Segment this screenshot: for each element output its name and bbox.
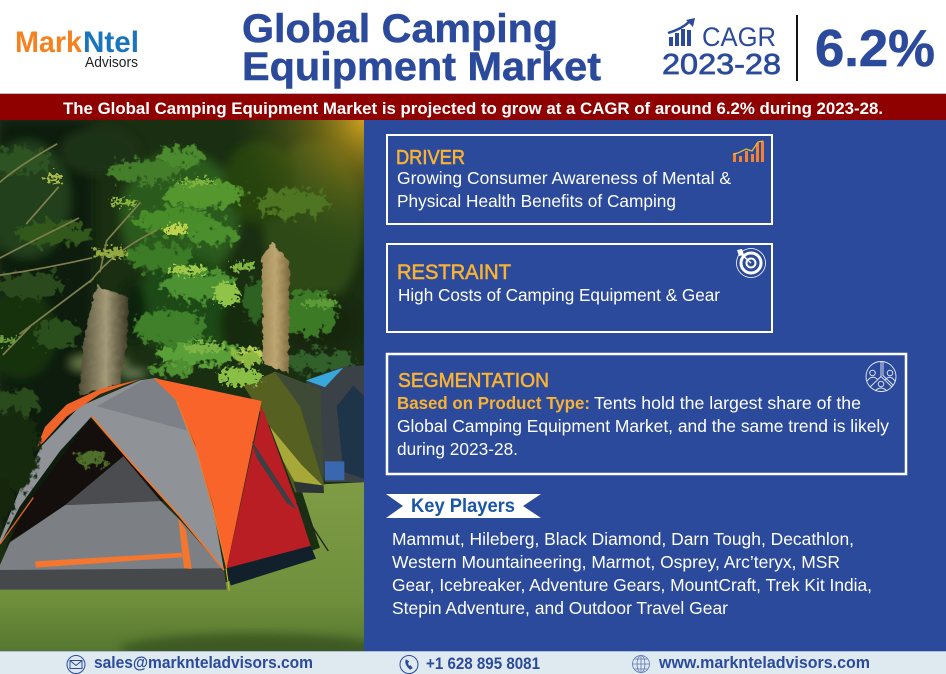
key players ribbon — [386, 494, 541, 518]
bright leaves — [0, 176, 337, 362]
tent: door opening — [2, 418, 163, 554]
driver text: Growing Consumer Awareness of Mental & — [397, 168, 731, 188]
red summary banner: The Global Camping Equipment Market is projected to grow at a CAGR of around 6.2% during 2023-28. — [63, 100, 883, 118]
dark foreground foliage over tent — [0, 410, 108, 520]
icon: segmented people circle — [866, 362, 896, 392]
foliage beside trunk — [150, 350, 260, 376]
logo: MarkNtel Advisors: Ntel — [83, 26, 139, 59]
logo: MarkNtel Advisors: Mark — [15, 26, 82, 59]
tent: navy hem — [227, 546, 316, 586]
tent: lower grey wall — [0, 501, 222, 570]
foreground fern — [218, 368, 262, 386]
website: www.marknteladvisors.com — [658, 653, 870, 672]
icon: globe — [632, 656, 650, 672]
key players list: Stepin Adventure, and Outdoor Travel Gear — [392, 598, 728, 618]
icon: CAGR growth chart — [668, 18, 695, 46]
background tent: blue — [306, 366, 364, 482]
key players ribbon: Key Players — [411, 496, 515, 517]
segmentation text: Based on Product Type: — [397, 393, 590, 413]
logo: MarkNtel Advisors — [15, 26, 139, 71]
driver text: Physical Health Benefits of Camping — [397, 191, 676, 211]
main tent — [0, 378, 328, 591]
title — [242, 7, 601, 89]
red summary banner — [0, 93, 946, 120]
panel: blue content background — [364, 120, 946, 652]
forest foliage — [0, 120, 364, 534]
tent: red side — [227, 406, 311, 568]
restraint heading: RESTRAINT — [397, 261, 511, 284]
segmentation text: Global Camping Equipment Market, and the same trend is likely — [397, 416, 889, 436]
panel: restraint — [387, 244, 772, 332]
mid-tone leaves — [0, 147, 357, 417]
header background — [0, 0, 946, 94]
photo: camping tents in forest — [0, 120, 387, 665]
CAGR value: 6.2% — [815, 20, 935, 78]
tent: orange straps — [35, 553, 182, 568]
icon: orange bar chart — [733, 141, 764, 162]
icon: target with arrow — [736, 248, 766, 278]
driver heading: DRIVER — [396, 147, 465, 169]
segmentation text: during 2023-28. — [397, 439, 518, 459]
key players list — [392, 529, 872, 618]
CAGR label: CAGR — [702, 22, 776, 52]
tent: base strip — [0, 568, 227, 590]
key players list: Gear, Icebreaker, Adventure Gears, MountCraft, Trek Kit India, — [392, 575, 872, 595]
panel: segmentation — [387, 354, 906, 474]
restraint text: High Costs of Camping Equipment & Gear — [398, 285, 720, 305]
tree trunks — [78, 242, 289, 396]
tent: grey fly — [0, 378, 224, 570]
key players list: Western Mountaineering, Marmot, Osprey, Arc’teryx, MSR — [392, 552, 840, 572]
panel: driver — [387, 135, 772, 224]
tent: inner grey strip — [65, 456, 161, 505]
grass — [0, 482, 364, 652]
segmentation text — [397, 393, 889, 459]
CAGR period: 2023-28 — [662, 49, 781, 81]
phone number: +1 628 895 8081 — [426, 654, 540, 673]
background tent: olive — [243, 372, 324, 493]
segmentation text: Tents hold the largest share of the — [594, 393, 861, 413]
tent: orange left strip — [37, 379, 140, 448]
divider — [796, 15, 798, 81]
footer bar — [0, 651, 946, 674]
branches — [0, 144, 157, 354]
logo: MarkNtel Advisors: Advisors — [85, 55, 138, 71]
title: Global Camping — [242, 7, 558, 51]
segmentation heading: SEGMENTATION — [398, 369, 549, 392]
tent: orange panel — [153, 378, 262, 568]
title: Equipment Market — [242, 45, 601, 89]
driver text — [397, 168, 731, 211]
icon: email — [67, 656, 85, 674]
key players list: Mammut, Hileberg, Black Diamond, Darn Tough, Decathlon, — [392, 529, 854, 549]
icon: phone — [400, 656, 418, 674]
email address: sales@marknteladvisors.com — [94, 653, 313, 672]
